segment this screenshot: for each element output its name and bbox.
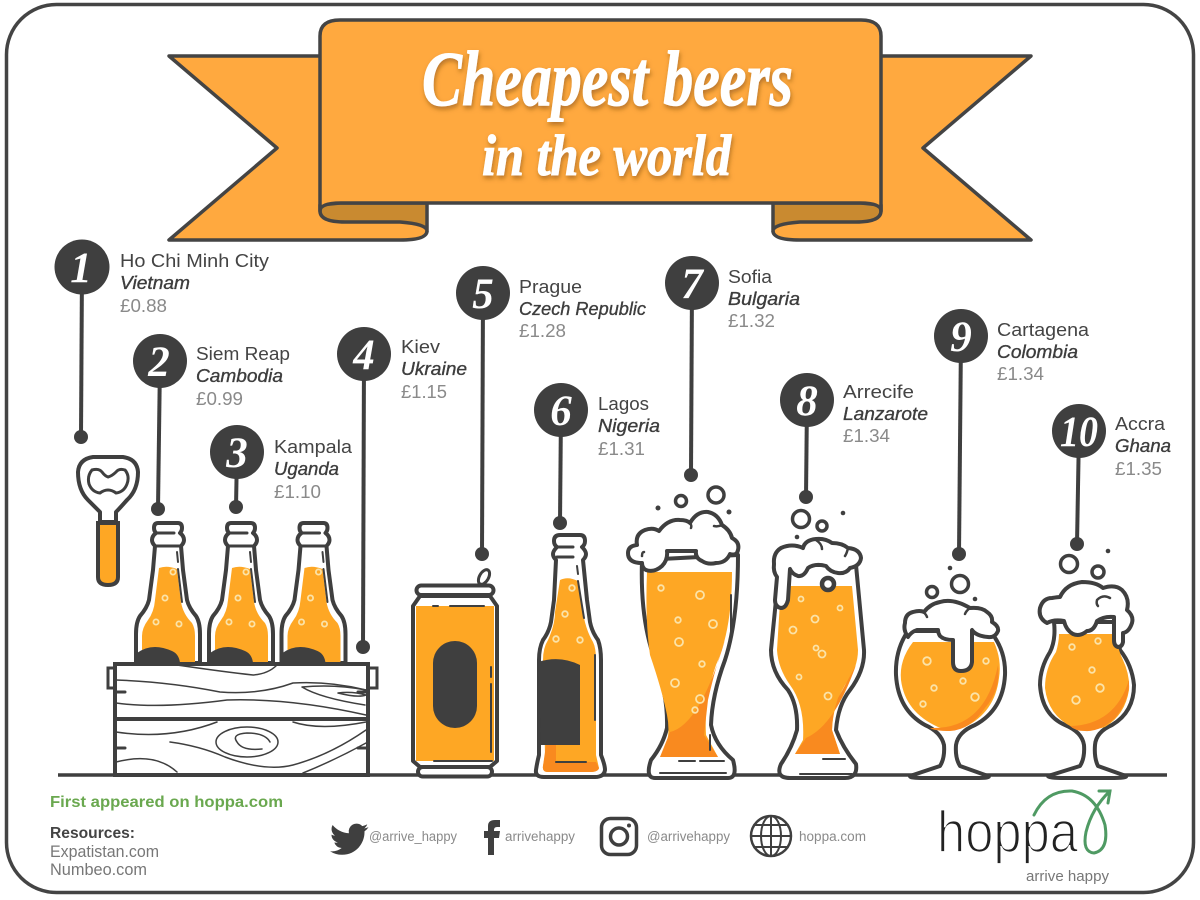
pin 2: Siem Reap: Cambodia xyxy=(196,365,283,386)
icon: bottle 3 xyxy=(282,523,346,663)
pin 10: Accra: Accra xyxy=(1115,413,1166,434)
pin 8: Arrecife: Lanzarote xyxy=(843,403,928,424)
pin 1: Ho Chi Minh City: Vietnam xyxy=(120,272,190,293)
pin 5: Prague: Czech Republic xyxy=(519,298,647,319)
pin 2: Siem Reap xyxy=(133,334,290,516)
title line two: in the world xyxy=(482,123,732,188)
pin 9: Cartagena xyxy=(934,309,1090,561)
pin 10: Accra: 10 xyxy=(1060,409,1098,456)
icon: bottle opener xyxy=(78,457,138,585)
pin 8: Arrecife xyxy=(780,373,928,504)
pin 2: Siem Reap: £0.99 xyxy=(196,388,243,409)
social: instagram: @arrivehappy xyxy=(647,829,730,844)
pin 2: Siem Reap: Siem Reap xyxy=(196,343,290,364)
resources list: Resources: xyxy=(50,825,135,842)
social: facebook xyxy=(484,820,575,855)
icon: small tulip glass with foam xyxy=(1040,549,1134,778)
social: website xyxy=(751,816,866,856)
pin 7: Sofia: £1.32 xyxy=(728,310,775,331)
banner right tail xyxy=(773,56,1031,240)
pin 6: Lagos: Lagos xyxy=(598,393,649,414)
icon: stemmed pint glass with foam xyxy=(771,510,864,778)
pin 6: Lagos xyxy=(534,383,660,530)
pin 8: Arrecife: 8 xyxy=(796,378,818,425)
pin 4: Kiev: Kiev xyxy=(401,336,441,357)
icon: tall beer bottle xyxy=(536,535,605,777)
pin 4: Kiev: 4 xyxy=(352,332,375,379)
pin 8: Arrecife: £1.34 xyxy=(843,425,890,446)
title line one: Cheapest beers xyxy=(422,35,793,122)
pin 1: Ho Chi Minh City xyxy=(54,240,270,444)
social: twitter xyxy=(330,824,457,855)
pin 10: Accra: £1.35 xyxy=(1115,458,1162,479)
hoppa logo xyxy=(937,791,1110,885)
social: twitter: @arrive_happy xyxy=(369,829,457,844)
pin 2: Siem Reap: 2 xyxy=(147,339,170,386)
pin 7: Sofia xyxy=(665,256,800,482)
banner main panel xyxy=(320,20,881,211)
pin 4: Kiev xyxy=(337,327,467,654)
ground line xyxy=(58,773,1167,777)
pin 4: Kiev: Ukraine xyxy=(401,358,467,379)
pin 5: Prague: 5 xyxy=(472,271,494,318)
icon: tulip glass with foam xyxy=(896,566,1005,778)
resources list: Numbeo.com xyxy=(50,861,147,879)
icon: bottle 1 xyxy=(136,523,200,663)
pin 9: Cartagena: Colombia xyxy=(997,341,1078,362)
pin 3: Kampala: Kampala xyxy=(274,436,353,457)
social: instagram xyxy=(602,818,730,854)
pin 1: Ho Chi Minh City: Ho Chi Minh City xyxy=(120,250,270,271)
pin 10: Accra xyxy=(1052,404,1171,551)
logo wordmark: hoppa xyxy=(937,800,1079,865)
social: website: hoppa.com xyxy=(799,829,866,844)
social: facebook: arrivehappy xyxy=(505,829,575,844)
pin 3: Kampala xyxy=(210,425,353,514)
resources list: Expatistan.com xyxy=(50,843,159,861)
pin 3: Kampala: £1.10 xyxy=(274,481,321,502)
pin 1: Ho Chi Minh City: £0.88 xyxy=(120,295,167,316)
pin 6: Lagos: 6 xyxy=(550,388,572,435)
icon: beer can xyxy=(413,568,497,776)
source credit: First appeared on hoppa.com xyxy=(50,794,283,811)
pin 5: Prague xyxy=(456,266,647,561)
pin 8: Arrecife: Arrecife xyxy=(843,381,914,402)
pin 5: Prague: £1.28 xyxy=(519,320,566,341)
pin 10: Accra: Ghana xyxy=(1115,435,1171,456)
logo tagline: arrive happy xyxy=(1026,868,1109,885)
crate with three bottles xyxy=(108,523,377,775)
pin 7: Sofia: Bulgaria xyxy=(728,288,800,309)
pin 7: Sofia: Sofia xyxy=(728,266,773,287)
resources list xyxy=(50,825,159,879)
pin 6: Lagos: Nigeria xyxy=(598,415,660,436)
pin 6: Lagos: £1.31 xyxy=(598,438,645,459)
pin 3: Kampala: 3 xyxy=(225,430,248,477)
pin 9: Cartagena: Cartagena xyxy=(997,319,1090,340)
pin 4: Kiev: £1.15 xyxy=(401,381,447,402)
icon: bottle 2 xyxy=(209,523,273,663)
title banner xyxy=(169,20,1031,240)
icon: wooden crate xyxy=(108,664,377,775)
logo arrow xyxy=(1034,791,1110,853)
banner left tail xyxy=(169,56,427,240)
icon: pilsner glass with foam xyxy=(628,487,738,778)
pin 9: Cartagena: 9 xyxy=(950,314,972,361)
pin 3: Kampala: Uganda xyxy=(274,458,339,479)
pin 9: Cartagena: £1.34 xyxy=(997,363,1044,384)
pin 5: Prague: Prague xyxy=(519,276,582,297)
pin 1: Ho Chi Minh City: 1 xyxy=(70,245,92,292)
pin 7: Sofia: 7 xyxy=(681,261,704,308)
